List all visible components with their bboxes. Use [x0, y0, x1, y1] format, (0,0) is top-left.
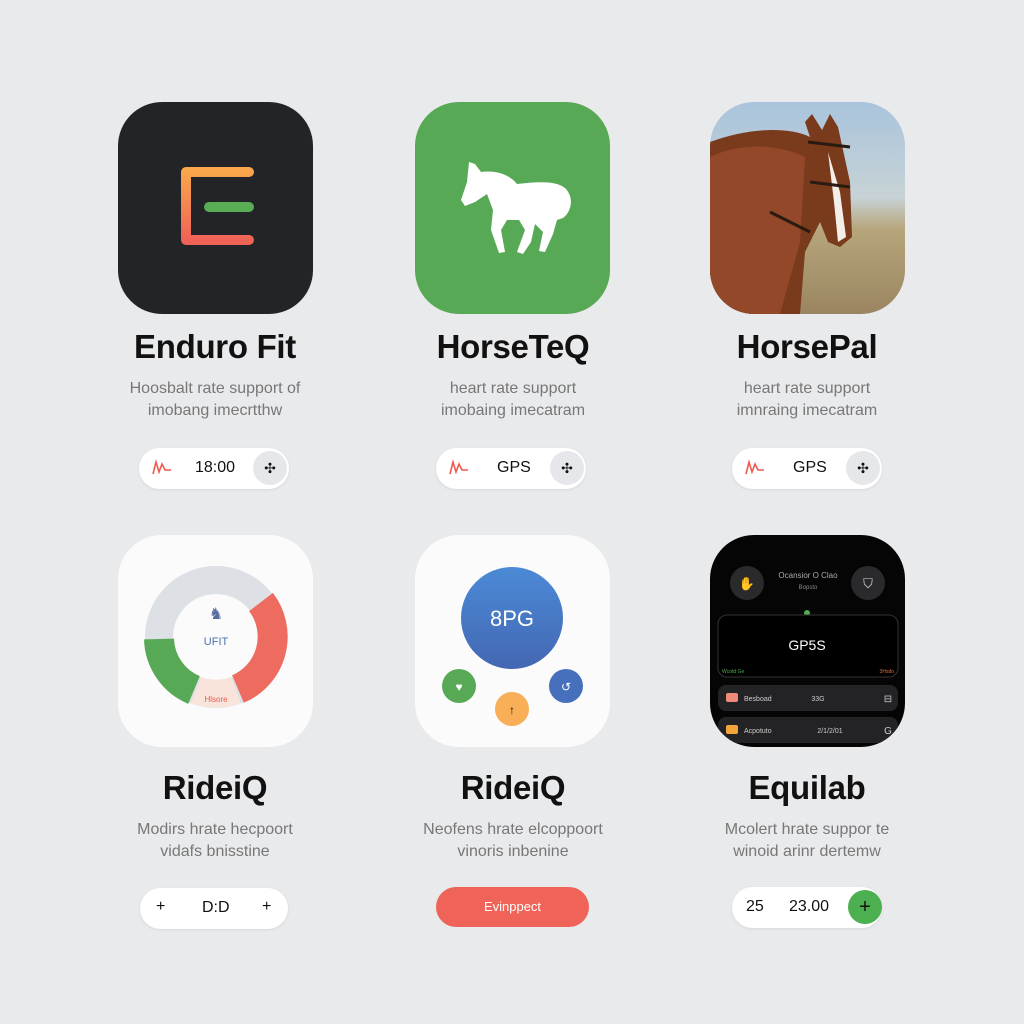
- pill: numbers: +: [859, 896, 871, 918]
- card: Equilab: [710, 535, 905, 929]
- icon: circle buttons: ↑: [509, 703, 515, 717]
- icon: green horse: [415, 102, 610, 314]
- description: heart rate support: [744, 380, 870, 397]
- description: [737, 380, 877, 419]
- card: RideiQ donut: [118, 535, 313, 930]
- description: Neofens hrate elcoppoort: [423, 821, 603, 838]
- title: HorsePal: [737, 328, 877, 365]
- icon: dark dashboard: G: [884, 726, 892, 737]
- card: HorsePal: [710, 102, 905, 490]
- pill: D:D controls: +: [156, 898, 165, 915]
- icon: donut chart: ♞: [209, 606, 223, 623]
- pill: D:D controls: D:D: [202, 899, 230, 916]
- description: imobaing imecatram: [441, 402, 585, 419]
- description: vinoris inbenine: [457, 843, 569, 860]
- description: [725, 821, 889, 860]
- icon: dark dashboard: Ocansior O Clao: [778, 571, 838, 580]
- icon: circle buttons: [415, 535, 610, 747]
- pill: GPS: ✣: [857, 460, 869, 476]
- pill: GPS: GPS: [497, 459, 531, 476]
- card: HorseTeQ: [415, 102, 610, 490]
- pill: numbers: 25: [746, 898, 764, 915]
- icon: donut chart: UFIT: [204, 636, 228, 648]
- pill: GPS: ✣: [561, 460, 573, 476]
- pill: GPS: [436, 448, 586, 489]
- icon: donut chart: [118, 535, 313, 747]
- icon: dark dashboard: Acpotuto: [744, 728, 772, 735]
- icon: circle buttons: ↺: [561, 680, 571, 694]
- pill: GPS: [732, 448, 882, 489]
- icon: Enduro Fit E logo: [118, 102, 313, 314]
- description: Hoosbalt rate support of: [130, 380, 300, 397]
- title: HorseTeQ: [437, 328, 589, 365]
- title: RideiQ: [461, 769, 565, 806]
- description: imnraing imecatram: [737, 402, 877, 419]
- icon: dark dashboard: GP5S: [788, 637, 826, 653]
- icon: dark dashboard: ⊟: [884, 694, 892, 705]
- pill: D:D controls: +: [262, 898, 271, 915]
- icon: dark dashboard: 2/1/2/01: [817, 728, 843, 735]
- icon: dark dashboard: ✋: [739, 576, 755, 591]
- description: Mcolert hrate suppor te: [725, 821, 889, 838]
- card: RideiQ circles: [415, 535, 610, 927]
- icon: circle buttons: 8PG: [490, 606, 534, 631]
- icon: horse photo: [710, 102, 905, 314]
- pill: GPS: GPS: [793, 459, 827, 476]
- description: Modirs hrate hecpoort: [137, 821, 293, 838]
- pill: time: [139, 448, 289, 489]
- icon: dark dashboard: ⛉: [863, 576, 873, 591]
- button: red: [436, 887, 589, 927]
- pill: numbers: [732, 887, 882, 928]
- icon: dark dashboard: Bopsto: [799, 585, 818, 591]
- pill: D:D controls: [140, 888, 288, 929]
- description: heart rate support: [450, 380, 576, 397]
- title: Enduro Fit: [134, 328, 296, 365]
- description: [423, 821, 603, 860]
- pill: numbers: 23.00: [789, 898, 829, 915]
- icon: donut chart: Hlsore: [204, 695, 228, 704]
- button: red: Evinppect: [484, 899, 541, 914]
- title: RideiQ: [163, 769, 267, 806]
- description: [130, 380, 300, 419]
- description: vidafs bnisstine: [160, 843, 270, 860]
- title: Equilab: [748, 769, 866, 806]
- description: imobang imecrtthw: [148, 402, 282, 419]
- icon: dark dashboard: 33G: [811, 696, 825, 703]
- pill: time: 18:00: [195, 459, 235, 476]
- icon: dark dashboard: Wcotd Ge: [722, 669, 744, 675]
- description: winoid arinr dertemw: [733, 843, 881, 860]
- pill: time: ✣: [264, 460, 276, 476]
- icon: dark dashboard: Besboad: [744, 696, 772, 703]
- icon: dark dashboard: 3Hsdo: [880, 669, 894, 675]
- description: [441, 380, 585, 419]
- icon: dark dashboard: [710, 535, 905, 747]
- description: [137, 821, 293, 860]
- icon: circle buttons: ♥: [455, 680, 463, 694]
- card: Enduro Fit: [118, 102, 313, 490]
